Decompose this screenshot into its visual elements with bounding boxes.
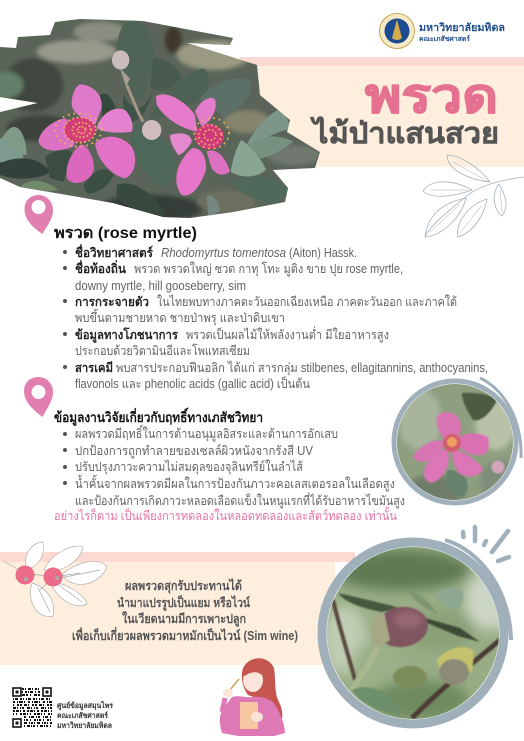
top header band (240, 57, 524, 167)
plant facts list: (Aiton) Hassk. (289, 246, 357, 260)
plant facts list: การกระจายตัว (75, 295, 149, 309)
research findings list: น้ำคั้นจากผลพรวดมีผลในการป้องกันภาวะคอเลสเตอรอลในเลือดสูง (75, 474, 395, 492)
caution note: อย่างไรก็ตาม เป็นเพียงการทดลองในหลอดทดลองและสัตว์ทดลอง เท่านั้น (54, 506, 397, 523)
hero photo: rose myrtle flowers (0, 15, 330, 225)
research findings list: และป้องกันการเกิดภาวะหลอดเลือดแข็งในหนูแรกที่ได้รับอาหารไขมันสูง (75, 492, 405, 509)
section heading: rose myrtle: พรวด (rose myrtle) (54, 225, 197, 242)
title (310, 69, 499, 150)
fruit uses text: เพื่อเก็บเกี่ยวผลพรวดมาหมักเป็นไวน์ (Sim wine) (72, 627, 298, 643)
plant facts list: พรวดเป็นผลไม้ให้พลังงานต่ำ มีใยอาหารสูง (186, 326, 389, 343)
plant facts list: downy myrtle, hill gooseberry, sim (75, 279, 246, 293)
circular photo: flower (394, 378, 521, 505)
research findings list: ปรับปรุงภาวะความไม่สมดุลของจุลินทรีย์ในลำไส้ (75, 460, 303, 475)
plant facts list: พบขึ้นตามชายหาด ชายป่าพรุ และป่าดิบเขา (75, 308, 285, 326)
flower right (156, 94, 197, 132)
research findings list: ปกป้องการถูกทำลายของเซลล์ผิวหนังจากรังสี UV (75, 444, 314, 459)
section heading: pharmacological research: ข้อมูลงานวิจัยเกี่ยวกับฤทธิ์ทางเภสัชวิทยา (54, 407, 263, 426)
flower left (38, 84, 135, 183)
footer credit: ศูนย์ข้อมูลสมุนไพร (57, 700, 114, 711)
plant facts list: ข้อมูลทางโภชนาการ (75, 327, 178, 343)
title: ไม้ป่าแสนสวย (310, 116, 499, 150)
bottom band (0, 552, 355, 665)
plant facts list: ในไทยพบทางภาคตะวันออกเฉียงเหนือ ภาคตะวันออก และภาคใต้ (157, 295, 457, 309)
plant facts list: พรวด พรวดใหญ่ ซวด กาทุ โทะ มูติง ขาย ปุย rose myrtle, (134, 261, 403, 277)
plant facts list: สารเคมี (75, 361, 113, 375)
sparkle accent marks (463, 527, 509, 561)
decorative leaf branch, top right (423, 155, 524, 237)
plant facts list: flavonols และ phenolic acids (gallic acid) เป็นต้น (75, 376, 310, 391)
title: พรวด (365, 69, 498, 122)
fruit uses text: ในเวียดนามมีการเพาะปลูก (122, 611, 246, 627)
plant facts list: พบสารประกอบฟีนอลิก ได้แก่ สารกลุ่ม stilbenes, ellagitannins, anthocyanins, (116, 361, 488, 376)
circular photo: fruit (320, 540, 515, 730)
leaves (150, 58, 182, 91)
plant facts list: ชื่อท้องถิ่น (75, 260, 126, 276)
fruit uses text: ผลพรวดสุกรับประทานได้ (125, 578, 242, 594)
plant facts list (63, 244, 488, 391)
research findings list (63, 424, 405, 509)
footer credit: คณะเภสัชศาสตร์ (57, 711, 109, 720)
illustration: woman with notepad (220, 658, 285, 736)
footer credit: มหาวิทยาลัยมหิดล (57, 721, 112, 730)
QR code (12, 687, 53, 728)
logo: Mahidol University: มหาวิทยาลัยมหิดล (419, 22, 505, 34)
decorative leaves with berries (3, 542, 107, 617)
logo: Mahidol University (380, 14, 505, 48)
plant facts list: Rhodomyrtus tomentosa (161, 246, 286, 260)
fruit uses text (72, 578, 298, 643)
location pin: section 2 (24, 377, 53, 417)
research findings list: ผลพรวดมีฤทธิ์ในการต้านอนุมูลอิสระและต้านการอักเสบ (75, 424, 338, 442)
plant facts list: ประกอบด้วยวิตามินอีและโพแทสเซียม (75, 343, 250, 358)
logo: Mahidol University: คณะเภสัชศาสตร์ (419, 34, 470, 43)
footer credit (57, 700, 114, 730)
location pin: section 1 (24, 195, 53, 234)
plant facts list: ชื่อวิทยาศาสตร์ (75, 244, 153, 260)
fruit uses text: นำมาแปรรูปเป็นแยม หรือไวน์ (117, 595, 250, 611)
